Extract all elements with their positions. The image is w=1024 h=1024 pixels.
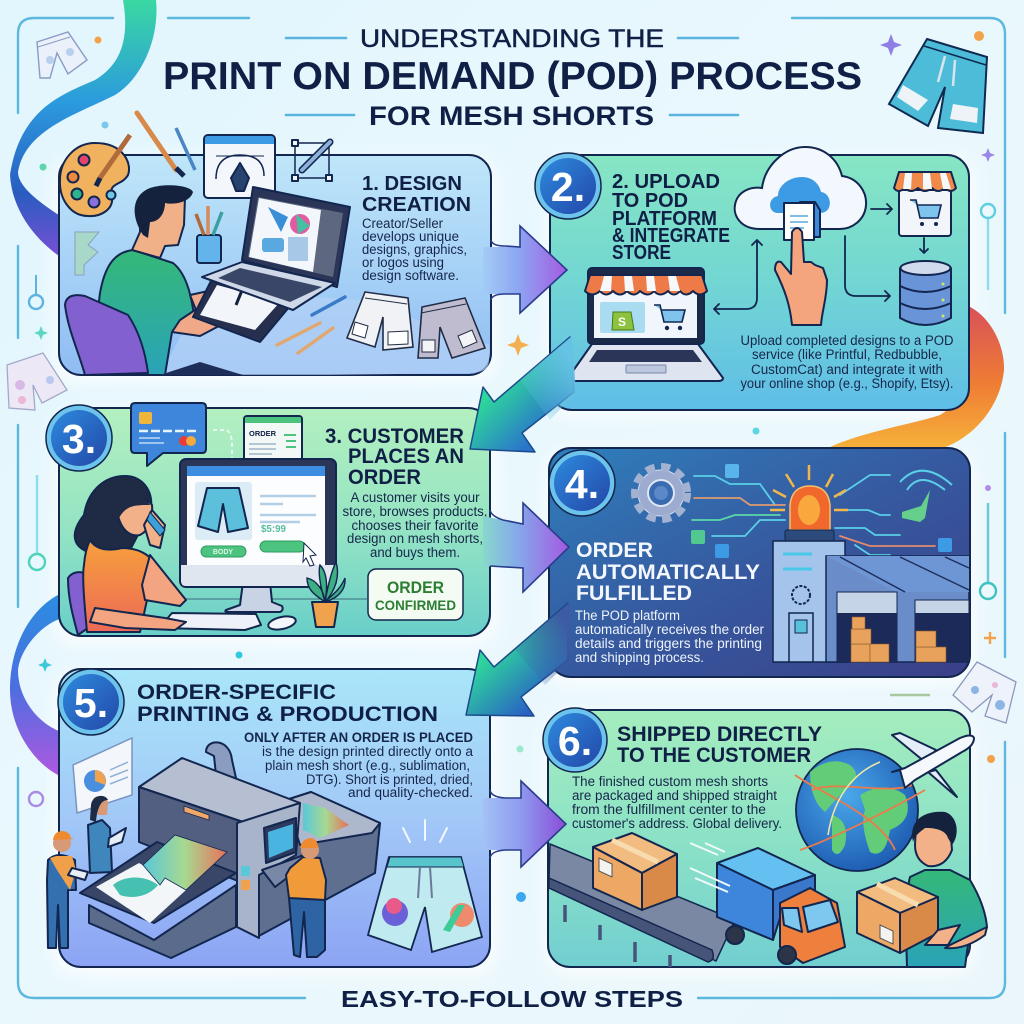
badge: order confirmed: [368, 569, 463, 620]
step 1 body: [362, 216, 467, 283]
step 3 body: A customer visits your: [350, 490, 480, 505]
panel glow: [55, 160, 973, 974]
step 5 heading: PRINTING & PRODUCTION: [137, 702, 438, 726]
step 5 body: DTG). Short is printed, dried,: [306, 772, 473, 787]
pencils: [277, 297, 345, 353]
step 4 body: automatically receives the order: [575, 622, 765, 637]
panel: step 3: [59, 403, 490, 636]
icon: swatch: [75, 232, 99, 275]
badge: step 2: 2.: [551, 164, 585, 210]
step 2 heading: & INTEGRATE: [612, 225, 730, 247]
panel: step 2: [550, 147, 969, 410]
chair: [65, 295, 148, 375]
rays: [403, 820, 447, 842]
badge: step 5: [58, 669, 124, 735]
step 1 body: develops unique: [362, 229, 459, 244]
mouse: [267, 614, 297, 632]
step 1 body: designs, graphics,: [362, 242, 467, 257]
icon: inner cloud: [770, 177, 830, 213]
pencil holder: [196, 206, 222, 263]
step 1 heading: 1. DESIGN: [362, 173, 462, 195]
desk: [160, 290, 489, 375]
arrow: 1 to 2: [483, 226, 567, 313]
step 4 body: and shipping process.: [575, 650, 704, 665]
icon: order sheet: ORDER: [249, 429, 277, 438]
icon: laptop store: S: [618, 315, 626, 329]
step 1 body: or logos using: [362, 255, 444, 270]
box held: [857, 878, 960, 953]
step 2 heading: PLATFORM: [612, 208, 717, 230]
person: customer: [75, 476, 186, 632]
warehouse: [826, 556, 969, 662]
badge: step 6: 6.: [558, 718, 592, 764]
icon: airplane: [892, 733, 974, 797]
title rules: [286, 38, 738, 115]
step 2 body: service (like Printful, Redbubble,: [752, 347, 942, 362]
step 6 body: are packaged and shipped straight: [572, 788, 777, 803]
step 3 heading: [325, 425, 464, 489]
step 2 heading: STORE: [612, 242, 671, 264]
icon: monitor: $5:99: [261, 524, 286, 535]
badge: step 4: 4.: [565, 461, 599, 507]
badge: order confirmed: CONFIRMED: [375, 597, 456, 613]
icon: shorts top right: [889, 39, 987, 133]
step 4 heading: FULFILLED: [576, 582, 692, 605]
person: designer: [98, 185, 253, 375]
footer text: EASY-TO-FOLLOW STEPS: [341, 986, 683, 1012]
ribbon: right orange: [826, 305, 1004, 449]
step 2 heading: 2. UPLOAD: [612, 171, 720, 193]
keyboard: [159, 613, 261, 630]
person: delivery: [905, 812, 987, 967]
building: [773, 541, 845, 662]
step 4 heading: [576, 539, 760, 605]
step 2 body: [740, 333, 954, 391]
icon: laptop store: [568, 268, 723, 381]
icon: palette: [60, 135, 130, 216]
step 5 body: [244, 730, 474, 800]
icon: shorts left: [7, 353, 67, 410]
plant: [307, 562, 345, 627]
laptop: [202, 187, 350, 310]
step 5 heading: ORDER-SPECIFIC: [137, 680, 336, 704]
title: PRINT ON DEMAND (POD) PROCESS: [163, 55, 862, 98]
panel: step 1: [59, 113, 491, 375]
badge: order confirmed: ORDER: [387, 578, 444, 597]
step 4 body: The POD platform: [575, 608, 680, 623]
step 3 heading: PLACES AN: [348, 445, 464, 468]
step 5 body: ONLY AFTER AN ORDER IS PLACED: [244, 730, 473, 745]
step 6 body: [572, 774, 782, 831]
icon: alarm light: [770, 465, 848, 541]
person: worker with tablet: [88, 796, 126, 873]
icon: monitor: BODY: [213, 549, 233, 556]
icon: shorts top left: [37, 32, 87, 78]
globe: [795, 749, 925, 871]
title: UNDERSTANDING THE: [360, 25, 664, 53]
step 3 body: and buys them.: [370, 545, 460, 560]
step 5 body: is the design printed directly onto a: [262, 744, 474, 759]
icon: chart board: [73, 738, 132, 813]
data lines: [692, 475, 935, 555]
step 2 heading: TO POD: [612, 190, 688, 212]
dashed link: [213, 430, 232, 460]
printer machine: [80, 758, 380, 958]
step 6 body: The finished custom mesh shorts: [572, 774, 768, 789]
step 4 body: details and triggers the printing: [575, 636, 762, 651]
title: FOR MESH SHORTS: [369, 101, 654, 131]
icon: brushes: [137, 113, 195, 176]
icon: store: [894, 172, 956, 236]
panel: step 6: [548, 710, 987, 967]
panel: step 4: [549, 448, 970, 677]
desk line: [150, 598, 367, 600]
step 2 body: Upload completed designs to a POD: [740, 333, 954, 348]
tablet: [193, 277, 295, 342]
icon: printed shorts: [368, 857, 482, 952]
step 2 body: CustomCat) and integrate it with: [751, 362, 943, 377]
connector arrows: [714, 204, 928, 314]
data chips: [691, 464, 952, 558]
step 1 heading: [362, 173, 471, 216]
step 1 body: Creator/Seller: [362, 216, 444, 231]
icon: pointing hand: [775, 228, 827, 325]
step 4 body: [575, 608, 765, 665]
icon: cloud: [735, 147, 866, 229]
step 6 heading: TO THE CUSTOMER: [617, 744, 811, 767]
step 3 body: design on mesh shorts,: [347, 531, 483, 546]
icon: signal: [900, 471, 952, 522]
arrow: 4 to 5: [466, 602, 570, 716]
arrow: 2 to 3: [470, 336, 576, 452]
speed lines: [690, 843, 730, 892]
box on conveyor: [593, 833, 677, 910]
icon: order sheet: [244, 416, 302, 464]
conveyor: [549, 844, 735, 967]
icon: gear: [635, 467, 687, 519]
chair: [68, 572, 92, 635]
step 3 heading: 3. CUSTOMER: [325, 425, 464, 448]
person: worker right: [286, 838, 326, 957]
shorts pattern: [418, 298, 485, 358]
badge: step 5: 5.: [74, 680, 108, 726]
step 5 heading: [137, 680, 438, 726]
panel: step 5: [47, 669, 490, 967]
step 2 body: your online shop (e.g., Shopify, Etsy).: [740, 376, 954, 391]
step 6 body: from the fulfillment center to the: [572, 802, 766, 817]
badge: step 3: [46, 405, 112, 471]
step 5 body: plain mesh short (e.g., sublimation,: [265, 758, 470, 773]
step 2 heading: [612, 171, 730, 264]
icon: bezier box: [292, 140, 332, 181]
step 5 body: and quality-checked.: [348, 785, 473, 800]
person: worker left: [47, 831, 88, 948]
arrow: 3 to 4: [483, 503, 569, 592]
step 6 heading: [617, 723, 822, 767]
badge: step 3: 3.: [62, 416, 96, 462]
step 3 body: store, browses products,: [342, 504, 488, 519]
step 1 body: design software.: [362, 268, 459, 283]
icon: shorts right: [953, 662, 1016, 723]
title: [163, 25, 862, 131]
step 3 heading: ORDER: [348, 466, 421, 489]
step 3 body: [342, 490, 488, 560]
ribbon: left top: [10, 0, 157, 258]
icon: document: [784, 202, 820, 240]
step 4 heading: ORDER: [576, 539, 653, 562]
ribbon: left lower: [10, 593, 62, 777]
step 1 heading: CREATION: [362, 194, 471, 216]
arrow: 5 to 6: [483, 781, 566, 867]
icon: pen tool window: [204, 135, 275, 198]
truck: [717, 848, 845, 964]
badge: step 2: [535, 153, 601, 219]
icon: monitor: [180, 459, 336, 612]
shorts white: [347, 292, 413, 350]
icon: credit card: [131, 403, 206, 466]
icon: duct: [206, 742, 236, 778]
step 3 body: chooses their favorite: [352, 518, 478, 533]
step 4 heading: AUTOMATICALLY: [576, 561, 760, 584]
step 6 body: customer's address. Global delivery.: [572, 816, 782, 831]
icon: database: [900, 261, 951, 325]
badge: step 4: [549, 450, 615, 516]
badge: step 6: [543, 708, 607, 772]
step 6 heading: SHIPPED DIRECTLY: [617, 723, 822, 746]
